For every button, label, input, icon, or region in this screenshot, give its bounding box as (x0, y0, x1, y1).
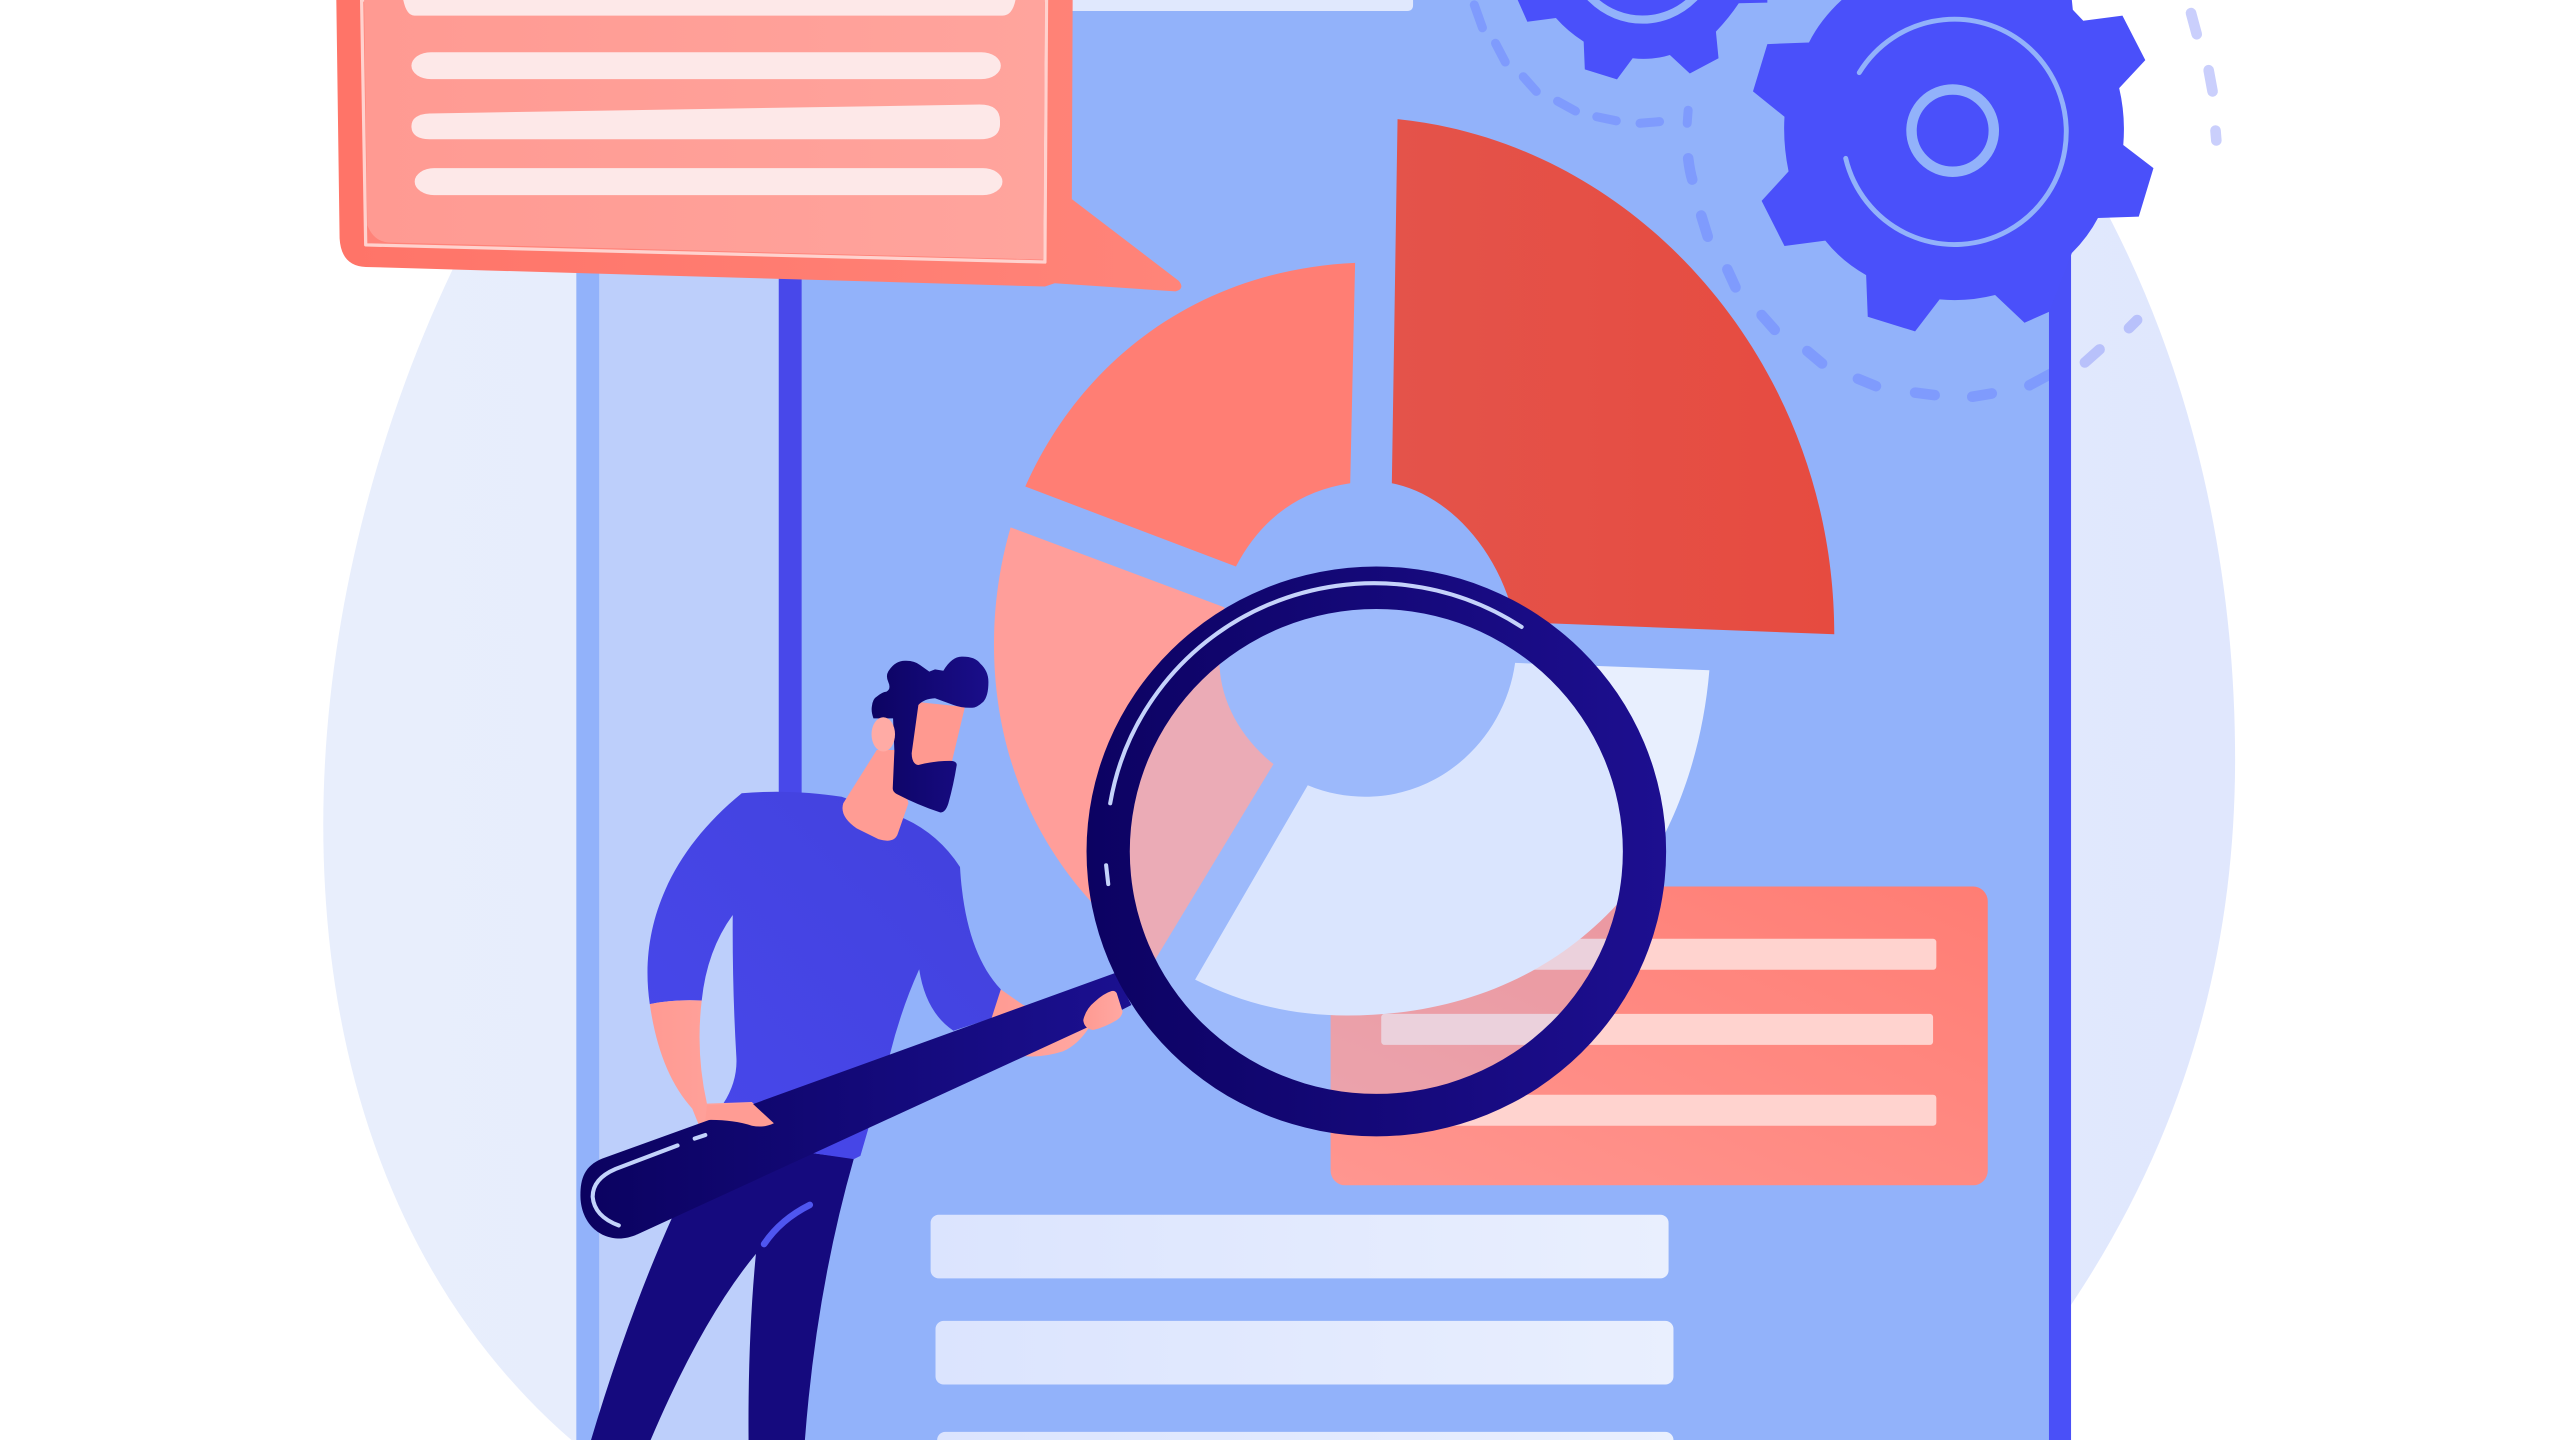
glass tint (1128, 607, 1624, 1094)
text bars (931, 1215, 1673, 1440)
magnifying glass (580, 567, 1666, 1239)
trouser crease (764, 1205, 810, 1244)
hair and beard (872, 657, 988, 812)
pie slice: coral (1025, 263, 1355, 567)
right arm skin (989, 989, 1091, 1057)
document page (576, 0, 2071, 1440)
ear (872, 717, 895, 752)
text card: coral (1331, 887, 1988, 1185)
handle highlight dash (695, 1135, 705, 1139)
background blob (323, 98, 2235, 1440)
left hand fingers (705, 1103, 774, 1127)
icon: large gear (1753, 0, 2153, 331)
note line 3 (411, 104, 1000, 139)
gear hub ring (1912, 89, 1994, 172)
lens ring (1087, 567, 1666, 1136)
lens highlight dash (1106, 865, 1108, 884)
figure: analyst (591, 657, 1091, 1440)
pie slice: white (1195, 663, 1709, 1016)
neck (842, 750, 908, 841)
top page strip (1061, 0, 1413, 11)
shirt (647, 792, 1001, 1159)
face (908, 702, 965, 776)
speech note (336, 0, 1181, 291)
note line 2 (411, 52, 1001, 79)
page right edge strip (2049, 245, 2071, 1440)
handle (580, 973, 1131, 1239)
handle highlight (593, 1145, 678, 1225)
note line 4 (415, 168, 1002, 195)
pie slice: pink (994, 527, 1273, 967)
note line 1 (403, 0, 1016, 16)
icon: small gear (1518, 0, 1767, 79)
pie slice: red (1392, 119, 1834, 634)
thumb (1083, 991, 1123, 1030)
gear arc (1846, 19, 2066, 245)
lens highlight (1110, 583, 1522, 803)
pie chart (994, 119, 1988, 1185)
dashed orbit lines (1474, 5, 2216, 397)
note inner panel (364, 0, 1045, 260)
trousers (591, 1153, 854, 1440)
left forearm (650, 1000, 774, 1127)
